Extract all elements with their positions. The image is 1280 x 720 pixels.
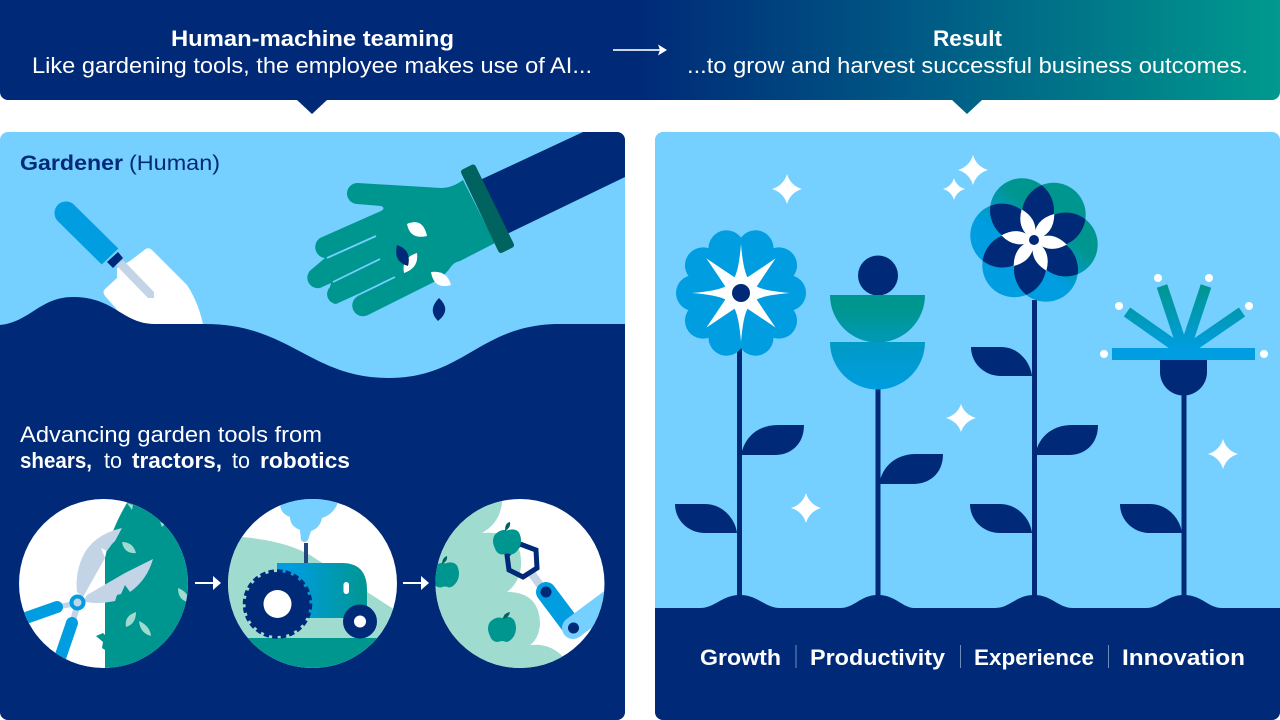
heading: result: Result	[933, 26, 1003, 51]
header banner	[0, 0, 1280, 114]
text: advancing garden tools: to	[104, 448, 122, 473]
icon: apples	[431, 522, 521, 642]
icon: gloved hand and arm	[307, 132, 625, 321]
outcome labels: Productivity	[810, 645, 946, 670]
text: advancing garden tools: robotics	[260, 448, 350, 473]
heading: gardener: (Human)	[129, 152, 220, 175]
outcome labels: Innovation	[1122, 645, 1245, 670]
flower: growth	[676, 226, 806, 360]
icon: trowel	[54, 201, 204, 330]
arrow: tractor to robotics	[403, 576, 429, 590]
soil band	[655, 595, 1280, 720]
arrow: header	[613, 44, 667, 56]
outcome labels	[700, 645, 1245, 670]
outcome labels: Experience	[974, 645, 1094, 670]
heading: gardener: Gardener	[20, 152, 123, 175]
text: advancing garden tools: tractors,	[132, 448, 222, 473]
outcome labels: Growth	[700, 645, 781, 670]
icon: seeds	[396, 222, 451, 321]
text: advancing garden tools: to	[232, 448, 250, 473]
heading: human-machine teaming: Human-machine teaming	[171, 26, 454, 51]
text: advancing garden tools: shears,	[20, 448, 92, 473]
panel: gardener	[0, 132, 625, 720]
flower: experience	[970, 178, 1098, 302]
sparkles	[772, 155, 1238, 523]
circle: shears	[19, 495, 195, 670]
flower: innovation	[1100, 274, 1268, 395]
text: employee makes use of AI: Like gardening tools, the employee makes use of AI...	[32, 53, 592, 78]
circle: tractor	[225, 495, 399, 670]
heading: gardener	[20, 154, 219, 174]
flower: productivity	[830, 256, 925, 390]
arrow: shears to tractor	[195, 576, 221, 590]
stems and leaves	[675, 300, 1186, 603]
text: grow and harvest: ...to grow and harvest successful business outcomes.	[687, 53, 1248, 78]
soil wave	[0, 297, 625, 720]
circle: robotics	[436, 499, 604, 668]
text: advancing garden tools: Advancing garden tools from	[20, 422, 322, 447]
panel: result	[655, 132, 1280, 720]
text: advancing garden tools	[20, 426, 349, 472]
